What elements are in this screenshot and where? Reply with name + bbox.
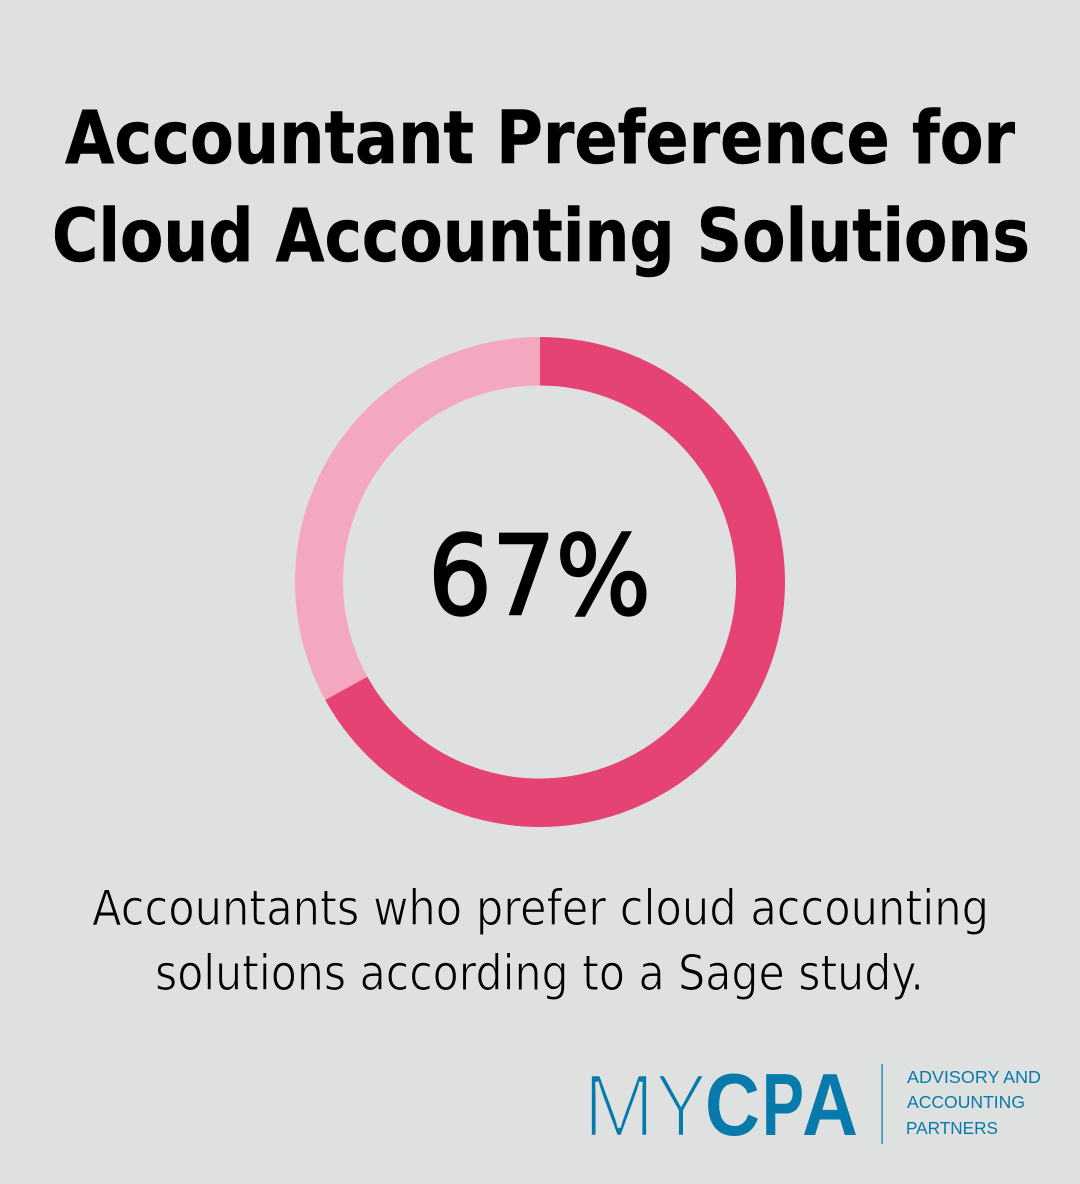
title — [52, 96, 1030, 279]
67% share arc — [325, 337, 785, 827]
remaining share arc — [295, 337, 540, 700]
logo wordmark CPA: P — [762, 1055, 804, 1154]
logo wordmark MY: Y — [655, 1056, 707, 1156]
percentage value: 67% — [428, 512, 651, 640]
caption — [92, 880, 989, 1002]
logo tagline — [906, 1067, 1041, 1138]
logo tagline: ACCOUNTING — [907, 1092, 1025, 1112]
logo divider — [882, 1064, 883, 1144]
logo wordmark CPA: C — [705, 1055, 760, 1154]
logo wordmark CPA — [705, 1055, 858, 1154]
logo wordmark CPA: A — [802, 1055, 858, 1154]
logo tagline: ADVISORY AND — [907, 1067, 1041, 1087]
logo wordmark MY: M — [583, 1056, 655, 1156]
logo tagline: PARTNERS — [906, 1118, 998, 1138]
donut chart: 67% — [295, 337, 785, 827]
caption: solutions according to a Sage study. — [155, 945, 924, 1002]
logo wordmark MY — [583, 1056, 707, 1156]
logo: MYCPA — [583, 1055, 1041, 1156]
